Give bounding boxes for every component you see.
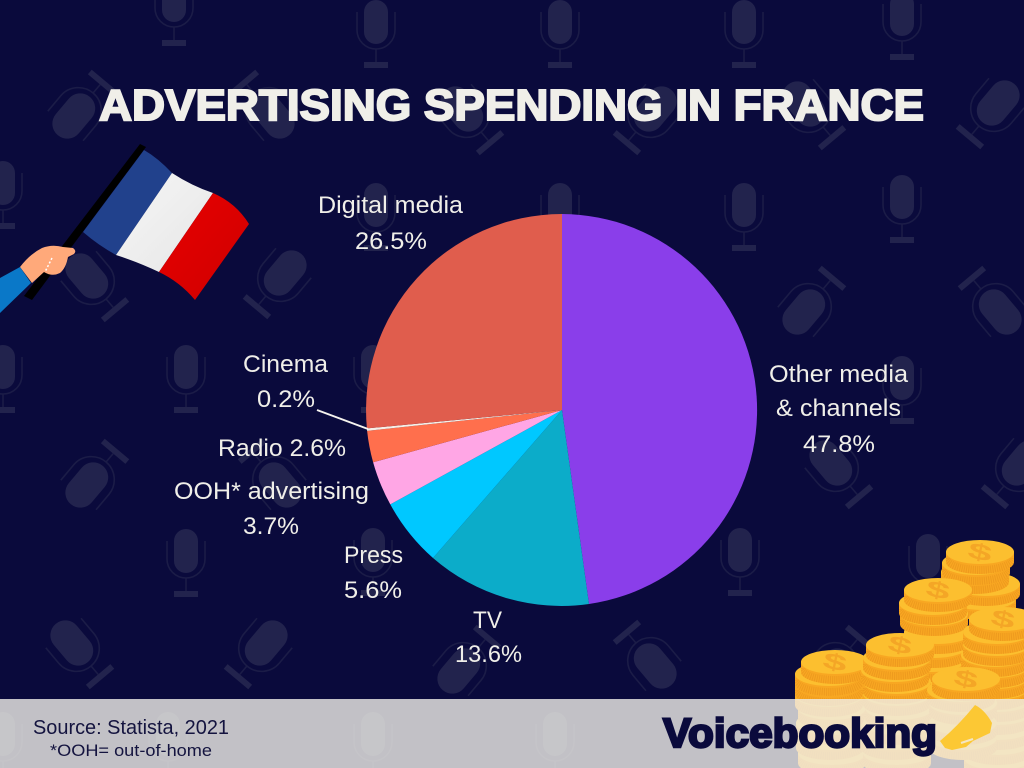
label: Press bbox=[344, 542, 403, 604]
slice: Cinema bbox=[367, 410, 562, 431]
footnote: *OOH= out-of-home bbox=[50, 741, 212, 760]
label: Cinema: Cinema bbox=[243, 351, 329, 378]
label: TV: TV bbox=[473, 607, 502, 634]
icon: gold coin stacks: $ bbox=[924, 576, 952, 605]
flag blue stripe bbox=[83, 150, 172, 255]
flag white stripe bbox=[116, 173, 213, 272]
label: Other media & channels bbox=[769, 361, 909, 458]
logo: Voicebooking wordmark: Voicebooking bbox=[663, 710, 937, 756]
label: Cinema: 0.2% bbox=[257, 386, 315, 413]
label: Digital media: 26.5% bbox=[355, 228, 427, 255]
label: OOH advertising: OOH* advertising bbox=[174, 478, 369, 505]
label: Other media & channels: 47.8% bbox=[803, 431, 875, 458]
label: Cinema bbox=[243, 351, 329, 413]
label: TV bbox=[455, 607, 522, 668]
hand bbox=[20, 246, 75, 283]
pie chart bbox=[366, 214, 757, 606]
label: Radio: Radio 2.6% bbox=[218, 435, 346, 462]
label: Other media & channels: Other media bbox=[769, 361, 909, 388]
label: Digital media bbox=[318, 192, 464, 255]
knuckles bbox=[45, 258, 52, 272]
icon: gold coin stacks: $ bbox=[989, 605, 1017, 634]
label: Press: 5.6% bbox=[344, 577, 402, 604]
label: Press: Press bbox=[344, 542, 403, 569]
slice: Press bbox=[390, 410, 562, 558]
icon: gold coin stacks: $ bbox=[952, 665, 980, 694]
flag red stripe bbox=[159, 193, 249, 300]
sleeve bbox=[0, 267, 31, 313]
title: ADVERTISING SPENDING IN FRANCE bbox=[99, 81, 924, 130]
icon: hand holding French flag bbox=[0, 144, 249, 313]
label: OOH advertising bbox=[174, 478, 369, 540]
slice: Other media & channels bbox=[562, 214, 757, 604]
label: OOH advertising: 3.7% bbox=[243, 513, 299, 540]
icon: gold coin stacks: $ bbox=[821, 648, 849, 677]
label: Digital media: Digital media bbox=[318, 192, 464, 219]
icon: gold coin stacks: $ bbox=[886, 631, 914, 660]
flag pole bbox=[24, 144, 146, 300]
icon: gold coin stacks: $ bbox=[966, 538, 994, 567]
label: Other media & channels: & channels bbox=[776, 395, 901, 422]
slice: Radio bbox=[367, 410, 562, 462]
label: TV: 13.6% bbox=[455, 641, 522, 668]
slice: OOH advertising bbox=[373, 410, 562, 504]
icon: megaphone bbox=[940, 705, 992, 750]
icon: gold coin stacks bbox=[795, 538, 1024, 768]
footer band bbox=[0, 699, 1024, 768]
source text: Source: Statista, 2021 bbox=[33, 717, 229, 739]
slice: TV bbox=[433, 410, 589, 606]
cinema leader line bbox=[317, 410, 368, 429]
slice: Digital media bbox=[366, 214, 562, 428]
